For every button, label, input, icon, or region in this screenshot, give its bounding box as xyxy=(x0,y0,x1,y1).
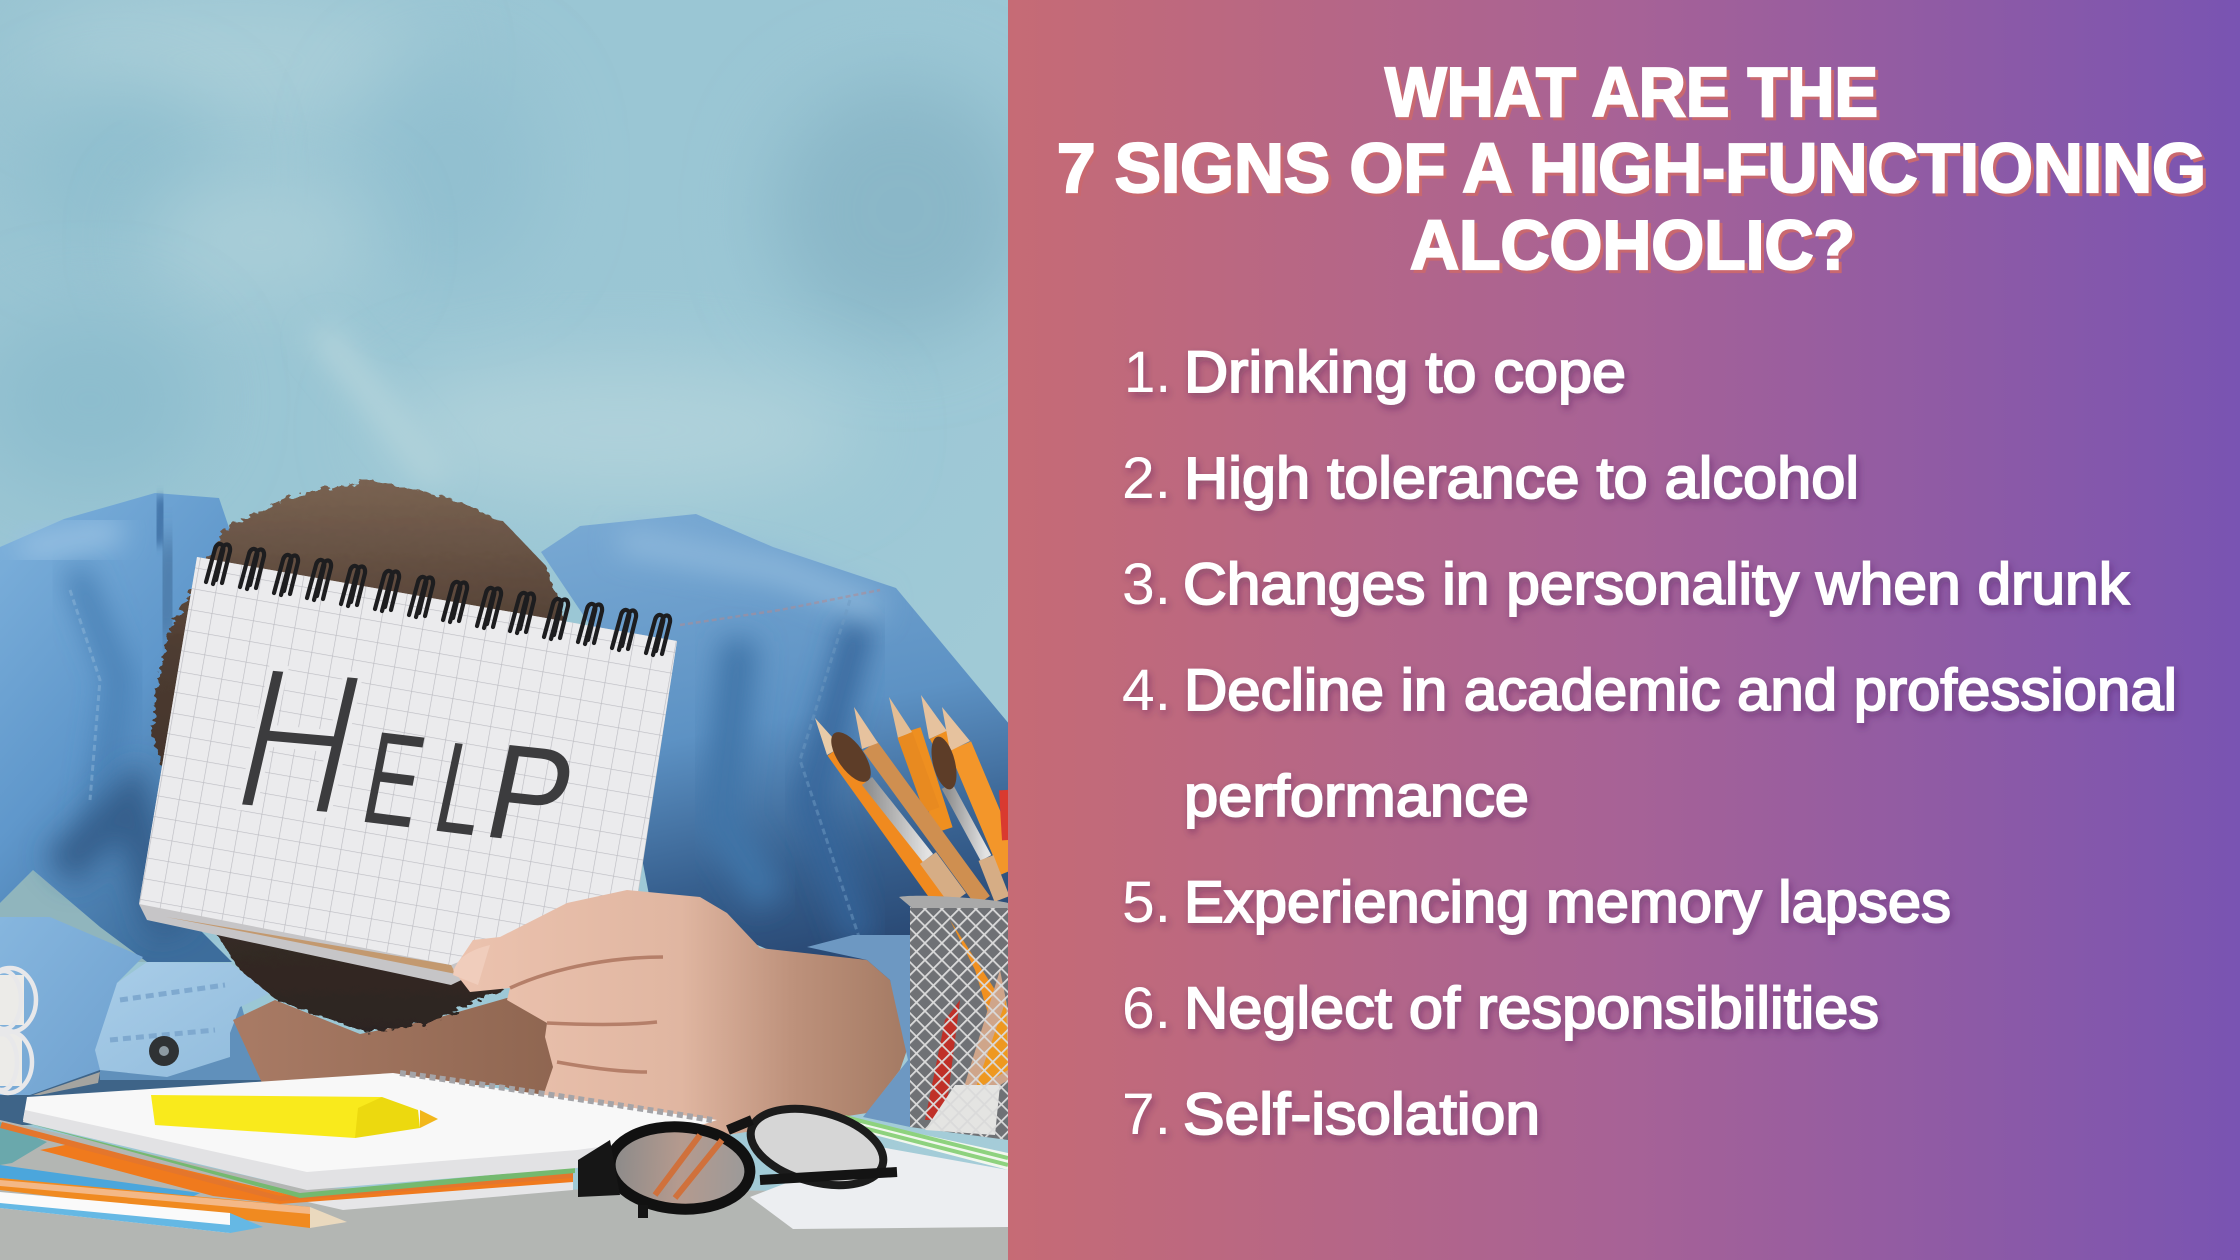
handwritten word HELP: L xyxy=(424,715,499,863)
list item 4: performance xyxy=(1184,764,1529,829)
handwritten word HELP: H xyxy=(216,624,384,860)
handwritten word HELP: P xyxy=(474,715,587,873)
list item 6: 6. xyxy=(1122,976,1171,1041)
photo: hand holding the notepad xyxy=(453,890,908,1135)
heading line 3: ALCOHOLIC? xyxy=(1410,206,1855,284)
photo: left sleeve and cuff with button xyxy=(0,917,268,1125)
handwritten word HELP xyxy=(236,666,570,838)
photo: binder rings at left edge xyxy=(0,968,36,1093)
photo: right shirt cuff xyxy=(807,935,910,1127)
list item 1: 1. xyxy=(1124,340,1171,405)
photo: hair and head xyxy=(151,480,570,1110)
heading line 1: WHAT ARE THE xyxy=(1385,53,1878,131)
heading: what are the 7 signs xyxy=(1057,53,2209,287)
panel: right gradient background xyxy=(1008,0,2240,1260)
list item 4: 4. xyxy=(1122,658,1171,723)
photo: mesh pen cup xyxy=(899,896,1008,1140)
list item 5: 5. xyxy=(1122,870,1171,935)
photo: yellow highlighter xyxy=(151,1095,438,1138)
list item 3: 3. xyxy=(1122,552,1171,617)
list item 3: Changes in personality when drunk xyxy=(1183,552,2130,617)
photo: pencils in lower left xyxy=(0,1165,347,1233)
cuff button xyxy=(149,1036,179,1066)
heading shadow: WHAT ARE THE xyxy=(1388,56,1881,134)
heading line 2: 7 SIGNS OF A HIGH-FUNCTIONING xyxy=(1057,129,2206,207)
photo: blue painted wall xyxy=(0,0,1030,1260)
list item 7: 7. xyxy=(1122,1082,1171,1147)
panel: photo of man holding a help note xyxy=(0,0,1030,1260)
list item 2: High tolerance to alcohol xyxy=(1184,446,1859,511)
heading shadow: 7 SIGNS OF A HIGH-FUNCTIONING xyxy=(1060,132,2209,210)
photo: small teal notebook xyxy=(0,1122,47,1165)
list item 5: Experiencing memory lapses xyxy=(1184,870,1951,935)
list item 7: Self-isolation xyxy=(1183,1082,1540,1147)
photo: loose worksheet and green ruler xyxy=(750,1115,1008,1229)
photo: stack of notebooks xyxy=(0,1073,717,1210)
heading shadow: ALCOHOLIC? xyxy=(1413,209,1858,287)
list item 1: Drinking to cope xyxy=(1184,340,1626,405)
photo: table surface xyxy=(0,1120,1008,1260)
spiral rings xyxy=(206,544,670,655)
list item 4: Decline in academic and professional xyxy=(1184,658,2177,723)
photo: denim shirt shoulders and back xyxy=(0,493,1010,1000)
photo: black glasses xyxy=(578,1096,897,1218)
heading shadow xyxy=(1060,56,2209,287)
list item 6: Neglect of responsibilities xyxy=(1184,976,1879,1041)
numbered list of seven signs xyxy=(1122,340,2177,1147)
photo: orange pencils and brushes xyxy=(815,695,1012,901)
photo: spiral notepad with HELP xyxy=(139,544,677,985)
handwritten word HELP: E xyxy=(352,704,435,856)
list item 4 xyxy=(1122,658,2177,829)
list item 2: 2. xyxy=(1122,446,1171,511)
